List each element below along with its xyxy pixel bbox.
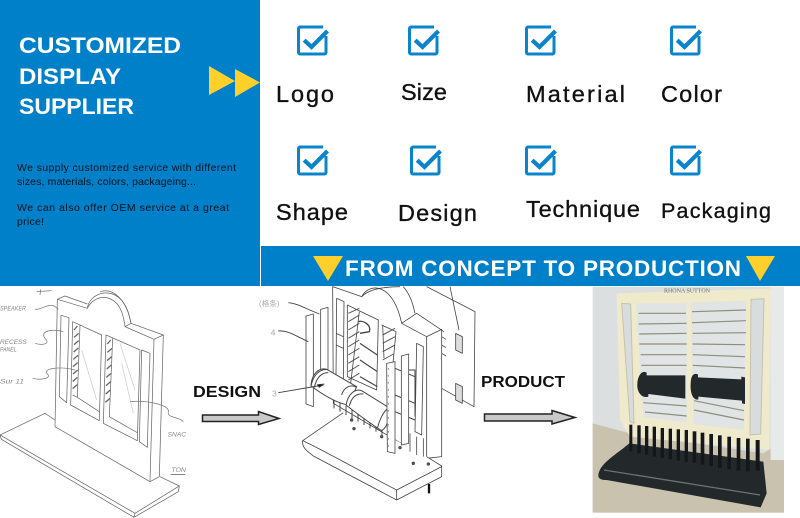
illustration: exploded drawing <box>259 287 475 500</box>
heading: customized display supplier <box>19 33 181 119</box>
option: material <box>526 27 625 107</box>
option: size: Size <box>401 79 447 105</box>
option: technique <box>526 147 640 222</box>
label: product: PRODUCT <box>481 374 565 391</box>
panel: customization options <box>276 27 771 226</box>
text block: service description <box>17 162 236 228</box>
illustration: concept sketch: RECESS <box>0 339 27 346</box>
label: design: DESIGN <box>193 384 261 401</box>
illustration: concept sketch: Sur 11 <box>0 378 24 385</box>
arrow: design <box>202 412 279 424</box>
option: technique: Technique <box>526 196 640 222</box>
heading: customized display supplier: CUSTOMIZED <box>19 33 181 58</box>
panel: blue intro <box>0 0 260 286</box>
option: material: Material <box>526 81 625 107</box>
option: color: Color <box>661 81 722 107</box>
option: shape <box>276 147 348 225</box>
option: design <box>398 147 477 226</box>
illustration: concept sketch: PANEL <box>0 347 17 354</box>
text block: service description: price! <box>17 216 44 228</box>
illustration: concept sketch: SPEAKER <box>0 306 26 313</box>
text block: service description: We can also offer OEM service at a great <box>17 202 229 214</box>
text block: service description: sizes, materials, colors, packageing... <box>17 176 196 188</box>
banner: from concept to production: FROM CONCEPT TO PRODUCTION <box>345 256 741 281</box>
option: logo: Logo <box>276 81 334 107</box>
photo: finished display <box>593 287 784 513</box>
option: packaging: Packaging <box>661 199 771 223</box>
option: size <box>401 27 447 105</box>
heading: customized display supplier: DISPLAY <box>19 64 121 89</box>
heading: customized display supplier: SUPPLIER <box>19 94 134 119</box>
illustration: exploded drawing: 4 <box>271 327 276 337</box>
option: shape: Shape <box>276 199 348 225</box>
illustration: concept sketch: SNAC <box>168 432 186 439</box>
option: logo <box>276 27 334 107</box>
option: color <box>661 27 722 107</box>
illustration: exploded drawing: 3 <box>272 389 277 399</box>
arrow: product <box>484 410 575 424</box>
option: design: Design <box>398 200 477 226</box>
icon: double yellow arrows <box>209 66 260 97</box>
banner: from concept to production <box>261 246 800 286</box>
illustration: concept sketch: TON <box>171 467 186 474</box>
option: packaging <box>661 147 771 223</box>
photo: finished display: RHONA SUTTON <box>664 288 710 295</box>
illustration: exploded drawing: (格条) <box>259 298 280 308</box>
text block: service description: We supply customized service with different <box>17 162 236 174</box>
illustration: concept sketch <box>0 289 186 517</box>
